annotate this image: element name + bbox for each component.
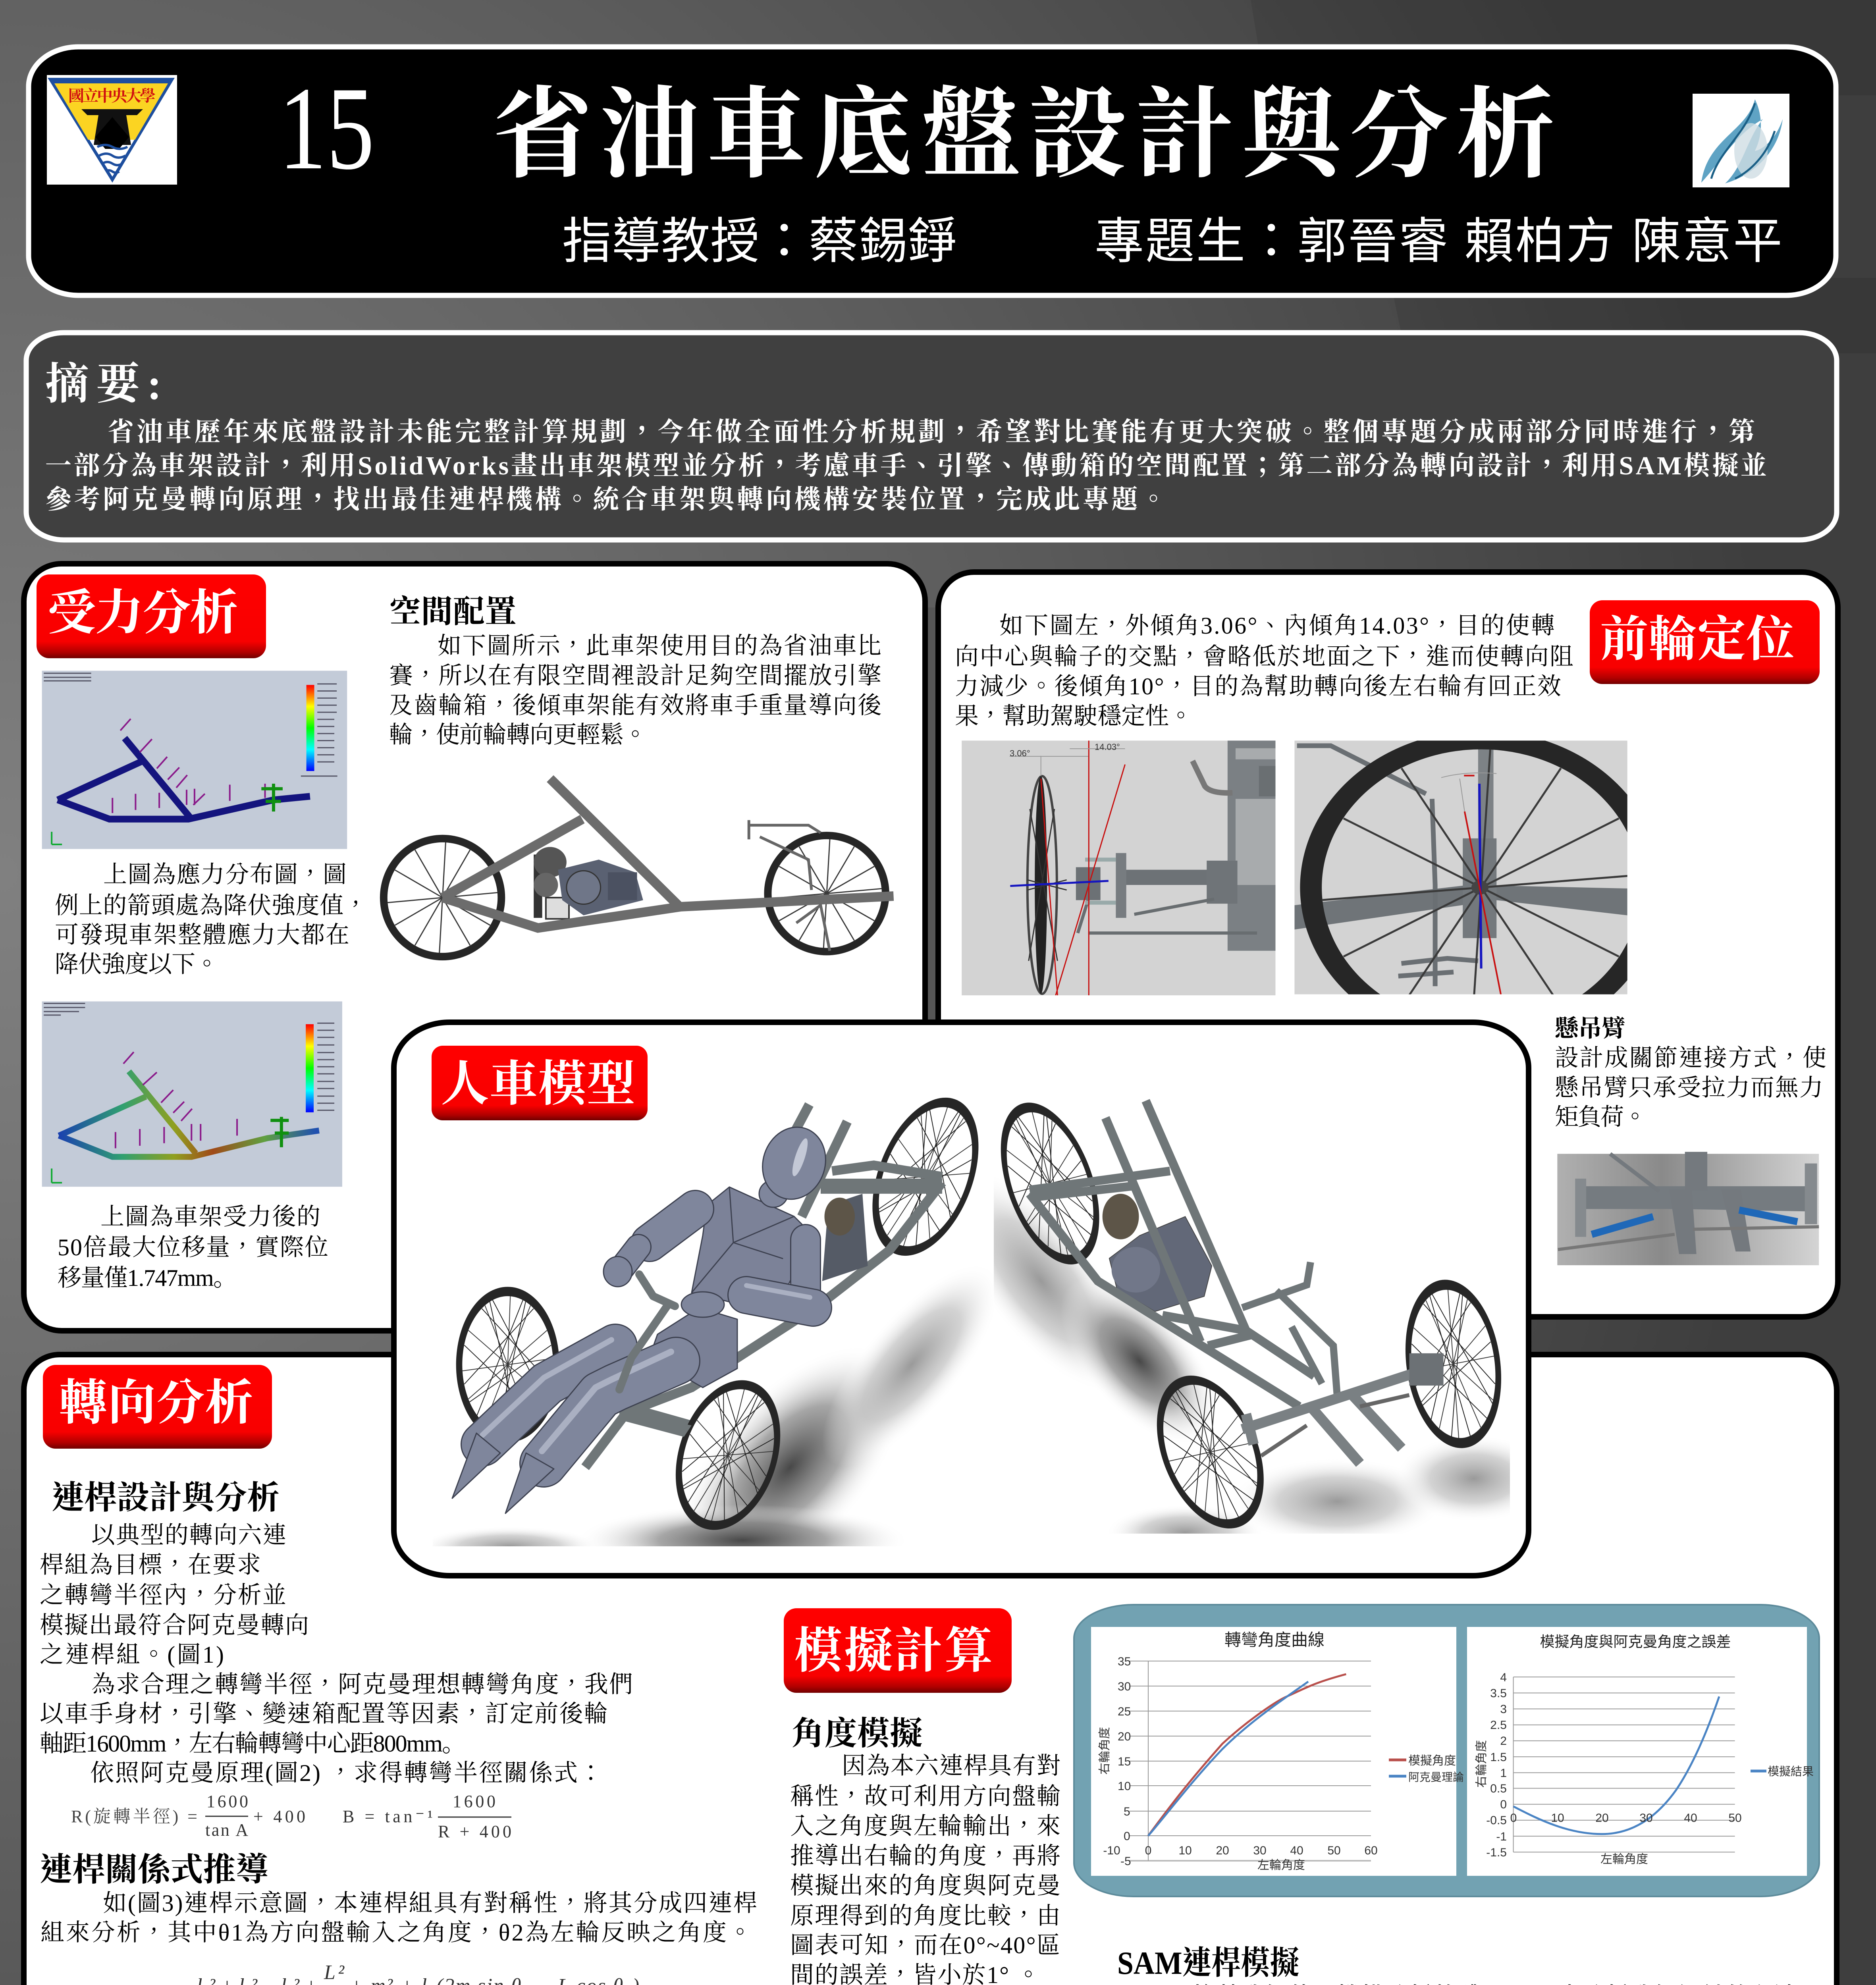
chart: steering angle curve: 60 <box>1364 1844 1378 1857</box>
chart: steering angle curve: 左輪角度 <box>1257 1859 1305 1872</box>
panel: rider and vehicle model <box>394 1022 1553 1630</box>
heading: spatial layout: 空間配置 <box>389 595 517 630</box>
text: spatial layout: 如下圖所示，此車架使用目的為省油車比 <box>438 633 881 659</box>
text: linkage design: 之轉彎半徑內，分析並 <box>40 1582 286 1608</box>
chart: steering angle curve: 10 <box>1118 1780 1131 1793</box>
chart: steering angle curve: 20 <box>1118 1730 1131 1743</box>
text: angle simulation: 圖表可知，而在0°~40°區 <box>790 1932 1060 1958</box>
heading: linkage design: 連桿設計與分析 <box>52 1480 280 1516</box>
heading: rider and vehicle model: 人車模型 <box>441 1058 635 1111</box>
abstract text: 一部分為車架設計，利用SolidWorks畫出車架模型並分析，考慮車手、引擎、傳動箱的空間配置；第二部分為轉向設計，利用SAM模擬並 <box>45 451 1767 480</box>
chart: angle error curve: 20 <box>1595 1812 1609 1825</box>
chart: angle error curve: 40 <box>1684 1812 1697 1825</box>
title number: 15 <box>279 62 374 194</box>
chart: steering angle curve: 0 <box>1124 1830 1130 1843</box>
text: linkage design: 桿組為目標，在要求 <box>40 1552 261 1578</box>
students: 專題生：郭晉睿 賴柏方 陳意平 <box>1095 214 1782 269</box>
chart: angle error curve: 右輪角度 <box>1475 1740 1488 1788</box>
model render: vehicle frame <box>914 1100 1553 1560</box>
text: linkage design: 依照阿克曼原理(圖2) ，求得轉彎半徑關係式： <box>90 1760 603 1786</box>
figure: mannequin rider <box>452 1119 835 1513</box>
panel: force analysis <box>24 564 925 1331</box>
formula: cosine relation: L² <box>324 1961 345 1984</box>
caption: displacement: 移量僅1.747mm。 <box>58 1265 237 1291</box>
chart: angle error curve: 0.5 <box>1490 1782 1507 1795</box>
chart: steering angle curve: 35 <box>1118 1655 1131 1668</box>
heading: steering analysis: 轉向分析 <box>59 1376 253 1430</box>
text: linkage design: 軸距1600mm，左右輪轉彎中心距800mm。 <box>40 1731 466 1757</box>
chart: angle error curve: 左輪角度 <box>1600 1853 1648 1866</box>
chart: steering angle curve: 5 <box>1124 1805 1130 1818</box>
heading: rider and vehicle model <box>432 1046 648 1120</box>
panel: front wheel alignment <box>938 572 1838 1317</box>
image: suspension arm <box>1557 1154 1819 1265</box>
abstract text <box>45 418 1767 514</box>
text: spatial layout: 及齒輪箱，後傾車架能有效將車手重量導向後 <box>389 692 881 719</box>
chart: angle error curve: -0.5 <box>1486 1814 1507 1827</box>
formula: turning radius: + 400 <box>253 1807 305 1826</box>
formula: turning radius: 1600 <box>206 1792 248 1811</box>
caption: stress: 降伏強度以下。 <box>55 951 219 977</box>
icon: lab logo <box>1693 94 1789 187</box>
chart: angle error curve: -1 <box>1496 1830 1507 1843</box>
text: alignment: 果，幫助駕駛穩定性。 <box>955 703 1193 729</box>
chart: steering angle curve: 0 <box>1145 1844 1151 1857</box>
text: spatial layout <box>389 633 881 748</box>
chart: angle error curve: 0 <box>1500 1798 1507 1811</box>
stress FEA image <box>42 671 347 849</box>
caption: stress: 例上的箭頭處為降伏強度值， <box>55 892 368 919</box>
text: linkage relation: 如(圖3)連桿示意圖，本連桿組具有對稱性，將其分成四連桿 <box>103 1890 757 1916</box>
chart: angle error curve: 4 <box>1500 1671 1507 1684</box>
chart: steering angle curve <box>1091 1627 1464 1876</box>
chart: steering angle curve: 40 <box>1290 1844 1303 1857</box>
chart: angle error curve <box>1467 1627 1814 1876</box>
chart: angle error curve: 30 <box>1639 1812 1653 1825</box>
text: angle simulation: 因為本六連桿具有對 <box>842 1753 1060 1779</box>
text: angle simulation: 模擬出來的角度與阿克曼 <box>790 1873 1060 1899</box>
text: angle simulation: 稱性，故可利用方向盤輸 <box>790 1783 1060 1810</box>
text: spatial layout: 輪，使前輪轉向更輕鬆。 <box>389 722 647 748</box>
text: angle simulation <box>790 1753 1060 1985</box>
chart: steering angle curve: 30 <box>1118 1680 1131 1693</box>
caption: displacement: 50倍最大位移量，實際位 <box>58 1234 328 1260</box>
text: suspension arm: 矩負荷。 <box>1555 1104 1647 1130</box>
heading: SAM simulation: SAM連桿模擬 <box>1117 1945 1299 1981</box>
text: linkage design <box>40 1522 633 1786</box>
text: linkage design: 為求合理之轉彎半徑，阿克曼理想轉彎角度，我們 <box>91 1671 633 1698</box>
icon: university emblem <box>47 75 177 185</box>
heading: simulation: 模擬計算 <box>794 1625 993 1678</box>
text: angle simulation: 原理得到的角度比較，由 <box>790 1903 1060 1929</box>
chart: steering angle curve: 50 <box>1327 1844 1341 1857</box>
caption: stress <box>55 861 368 977</box>
caption: displacement <box>58 1204 328 1291</box>
angle labels: 14.03° <box>1095 742 1120 752</box>
chart: angle error curve: 模擬結果 <box>1768 1765 1814 1778</box>
text: suspension arm: 懸吊臂只承受拉力而無力 <box>1555 1075 1823 1101</box>
heading: angle simulation: 角度模擬 <box>792 1715 922 1752</box>
text: alignment: 如下圖左，外傾角3.06°、內傾角14.03°，目的使轉 <box>999 613 1555 639</box>
text: alignment: 向中心與輪子的交點，會略低於地面之下，進而使轉向阻 <box>955 644 1573 670</box>
image: camber and kingpin angle <box>962 741 1275 995</box>
heading: simulation <box>784 1608 1012 1693</box>
chart: steering angle curve: 模擬角度 <box>1408 1754 1456 1767</box>
heading: linkage relation: 連桿關係式推導 <box>40 1852 268 1888</box>
text: linkage relation: 組來分析，其中θ1為方向盤輸入之角度，θ2為左輪反映之角度。 <box>40 1919 752 1946</box>
chart: steering angle curve: 30 <box>1253 1844 1267 1857</box>
caption: displacement: 上圖為車架受力後的 <box>100 1204 320 1230</box>
formula: turning radius <box>71 1792 511 1841</box>
chart: angle error curve: 10 <box>1551 1812 1564 1825</box>
heading: suspension arm: 懸吊臂 <box>1555 1016 1625 1042</box>
panel: abstract <box>26 333 1837 540</box>
chart: steering angle curve: 25 <box>1118 1705 1131 1718</box>
chart: steering angle curve: -5 <box>1120 1855 1131 1868</box>
chart: angle error curve: 0 <box>1510 1812 1517 1825</box>
caption: stress: 可發現車架整體應力大都在 <box>55 922 349 948</box>
text: alignment <box>955 613 1573 729</box>
formula: cosine relation <box>61 1961 639 1985</box>
chart: steering angle curve: 20 <box>1216 1844 1229 1857</box>
heading: front wheel alignment: 前輪定位 <box>1600 613 1795 667</box>
advisor: 指導教授：蔡錫錚 <box>562 214 957 269</box>
formula: turning radius: R(旋轉半徑) = <box>71 1807 197 1826</box>
bike frame side view <box>380 779 894 960</box>
text: linkage relation <box>40 1890 757 1946</box>
panel: simulation charts <box>1074 1605 1819 1896</box>
formula: turning radius: B = tan⁻¹ <box>343 1807 433 1826</box>
image: caster angle <box>1294 741 1627 994</box>
text: linkage design: 以車手身材，引擎、變速箱配置等因素，訂定前後輪 <box>40 1701 608 1727</box>
displacement FEA image <box>42 1001 342 1187</box>
heading: force analysis <box>37 574 266 658</box>
chart: steering angle curve: 阿克曼理論 <box>1408 1771 1464 1783</box>
icon: university emblem: 國立中央大學 <box>68 87 156 105</box>
title banner <box>29 47 1836 295</box>
chart: angle error curve: 2.5 <box>1490 1719 1507 1732</box>
chart: angle error curve: 3.5 <box>1490 1687 1507 1700</box>
chart: angle error curve: 2 <box>1500 1734 1507 1748</box>
chart: angle error curve: 50 <box>1728 1812 1742 1825</box>
abstract text: 省油車歷年來底盤設計未能完整計算規劃，今年做全面性分析規劃，希望對比賽能有更大突破。整個專題分成兩部分同時進行，第 <box>108 418 1755 447</box>
heading: front wheel alignment <box>1590 600 1820 684</box>
text: angle simulation: 推導出右輪的角度，再將 <box>790 1843 1060 1869</box>
formula: turning radius: 1600 <box>453 1792 496 1811</box>
formula: turning radius: tan A <box>205 1820 248 1840</box>
text: suspension arm: 設計成關節連接方式，使 <box>1555 1045 1826 1071</box>
angle labels <box>1010 742 1120 758</box>
text: linkage design: 以典型的轉向六連 <box>91 1522 286 1548</box>
chart: steering angle curve: 轉彎角度曲線 <box>1224 1630 1325 1649</box>
formula: turning radius: R + 400 <box>438 1822 511 1841</box>
angle labels: 3.06° <box>1010 748 1030 758</box>
heading: steering analysis <box>43 1365 272 1449</box>
text: linkage design: 之連桿組。(圖1) <box>40 1642 224 1668</box>
caption: stress: 上圖為應力分布圖，圖 <box>103 861 347 888</box>
chart: steering angle curve: 15 <box>1118 1755 1131 1768</box>
chart: steering angle curve: 右輪角度 <box>1098 1727 1111 1775</box>
chart: angle error curve: -1.5 <box>1486 1846 1507 1859</box>
chart: angle error curve: 1 <box>1500 1767 1507 1780</box>
model render: rider on vehicle <box>418 1094 1030 1630</box>
title text: 省油車底盤設計與分析 <box>493 81 1555 191</box>
text: alignment: 力減少。後傾角10°，目的為幫助轉向後左右輪有回正效 <box>955 673 1561 700</box>
panel: steering analysis <box>24 1355 1837 1985</box>
text: suspension arm <box>1555 1045 1826 1130</box>
chart: steering angle curve: -10 <box>1103 1844 1120 1857</box>
chart: angle error curve: 3 <box>1500 1703 1507 1716</box>
text: linkage design: 模擬出最符合阿克曼轉向 <box>40 1612 309 1638</box>
heading: force analysis: 受力分析 <box>48 586 238 640</box>
abstract text: 參考阿克曼轉向原理，找出最佳連桿機構。統合車架與轉向機構安裝位置，完成此專題。 <box>45 485 1166 514</box>
chart: angle error curve: 1.5 <box>1490 1751 1507 1764</box>
abstract heading: 摘要: <box>45 360 162 409</box>
chart: angle error curve: 模擬角度與阿克曼角度之誤差 <box>1540 1634 1731 1650</box>
text: spatial layout: 賽，所以在有限空間裡設計足夠空間擺放引擎 <box>389 663 881 689</box>
chart: steering angle curve: 10 <box>1178 1844 1192 1857</box>
text: angle simulation: 入之角度與左輪輸出，來 <box>790 1813 1060 1839</box>
